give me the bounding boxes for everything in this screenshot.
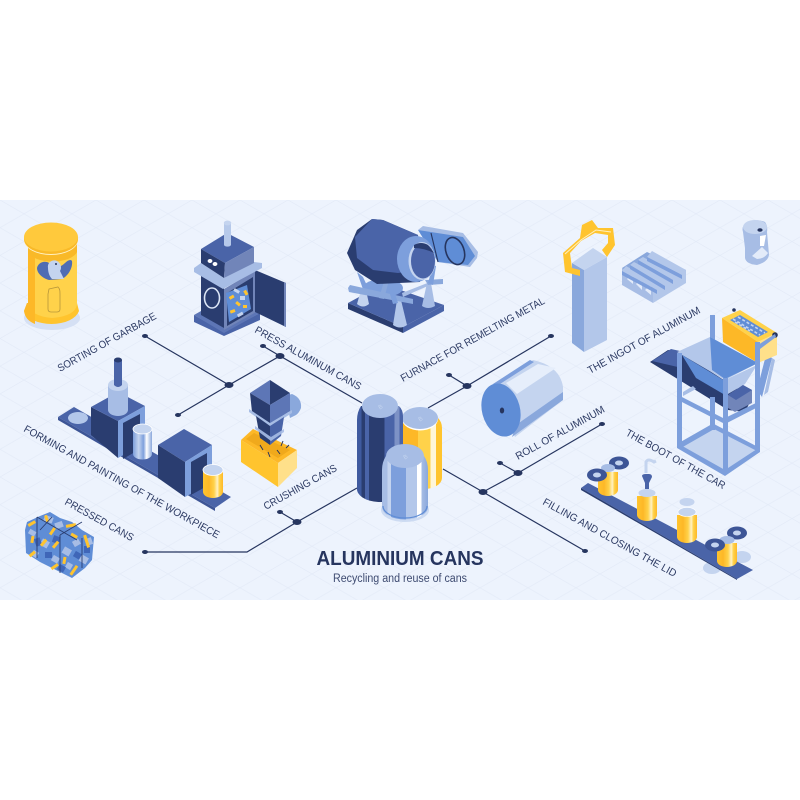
icon: roll of aluminium (476, 360, 563, 441)
icon: filling and closing conveyor (581, 456, 753, 580)
can 4 (717, 536, 737, 567)
icon: bale of pressed cans (25, 512, 94, 578)
connector lines (142, 334, 605, 554)
label: crushing cans: CRUSHING CANS (262, 462, 339, 513)
crushed cans inside the press (226, 285, 251, 322)
icon: stack of ingots (622, 251, 686, 303)
label: filling and closing the lid: FILLING AND CLOSING THE LID (541, 496, 679, 580)
title: ALUMINIUM CANS (316, 548, 484, 570)
navy can: B (378, 404, 384, 411)
can 3 with lid (677, 498, 697, 543)
icon: crushing machine (241, 380, 301, 487)
central aluminium cans (357, 394, 442, 522)
label: pressed cans: PRESSED CANS (63, 496, 136, 544)
yellow can on belt (203, 464, 223, 498)
icon: conveyor forming and painting machine (58, 358, 231, 511)
furnace lid (418, 226, 478, 267)
label: the boot of the car: THE BOOT OF THE CAR (624, 427, 728, 492)
icon: yellow garbage bin (24, 222, 80, 330)
can 1 (598, 464, 618, 496)
icon: hopper machine (650, 308, 778, 476)
label: the ingot of aluminum: THE INGOT OF ALUMINUM (586, 305, 703, 377)
icon: bin opening with can (37, 260, 72, 280)
label: sorting of garbage: SORTING OF GARBAGE (56, 310, 159, 375)
icon: furnace for remelting metal (347, 219, 478, 333)
subtitle: Recycling and reuse of cans (333, 573, 467, 585)
yellow hopper box (722, 308, 778, 363)
icon: aluminium ingot with yellow clamp (563, 220, 615, 352)
label: forming and painting of the workpiece: FORMING AND PAINTING OF THE WORKPIECE (22, 423, 222, 541)
icon: crushed can (742, 220, 769, 265)
icon: press machine (194, 221, 286, 336)
can 2 with nozzle (637, 460, 657, 521)
label: furnace for remelting metal: FURNACE FOR REMELTING METAL (399, 295, 547, 385)
silver can on belt (133, 424, 152, 460)
label: press aluminum cans: PRESS ALUMINUM CANS (253, 324, 363, 393)
silver can: B (403, 454, 409, 461)
yellow can: B (418, 416, 424, 423)
label: roll of aluminum: ROLL OF ALUMINUM (514, 404, 607, 463)
